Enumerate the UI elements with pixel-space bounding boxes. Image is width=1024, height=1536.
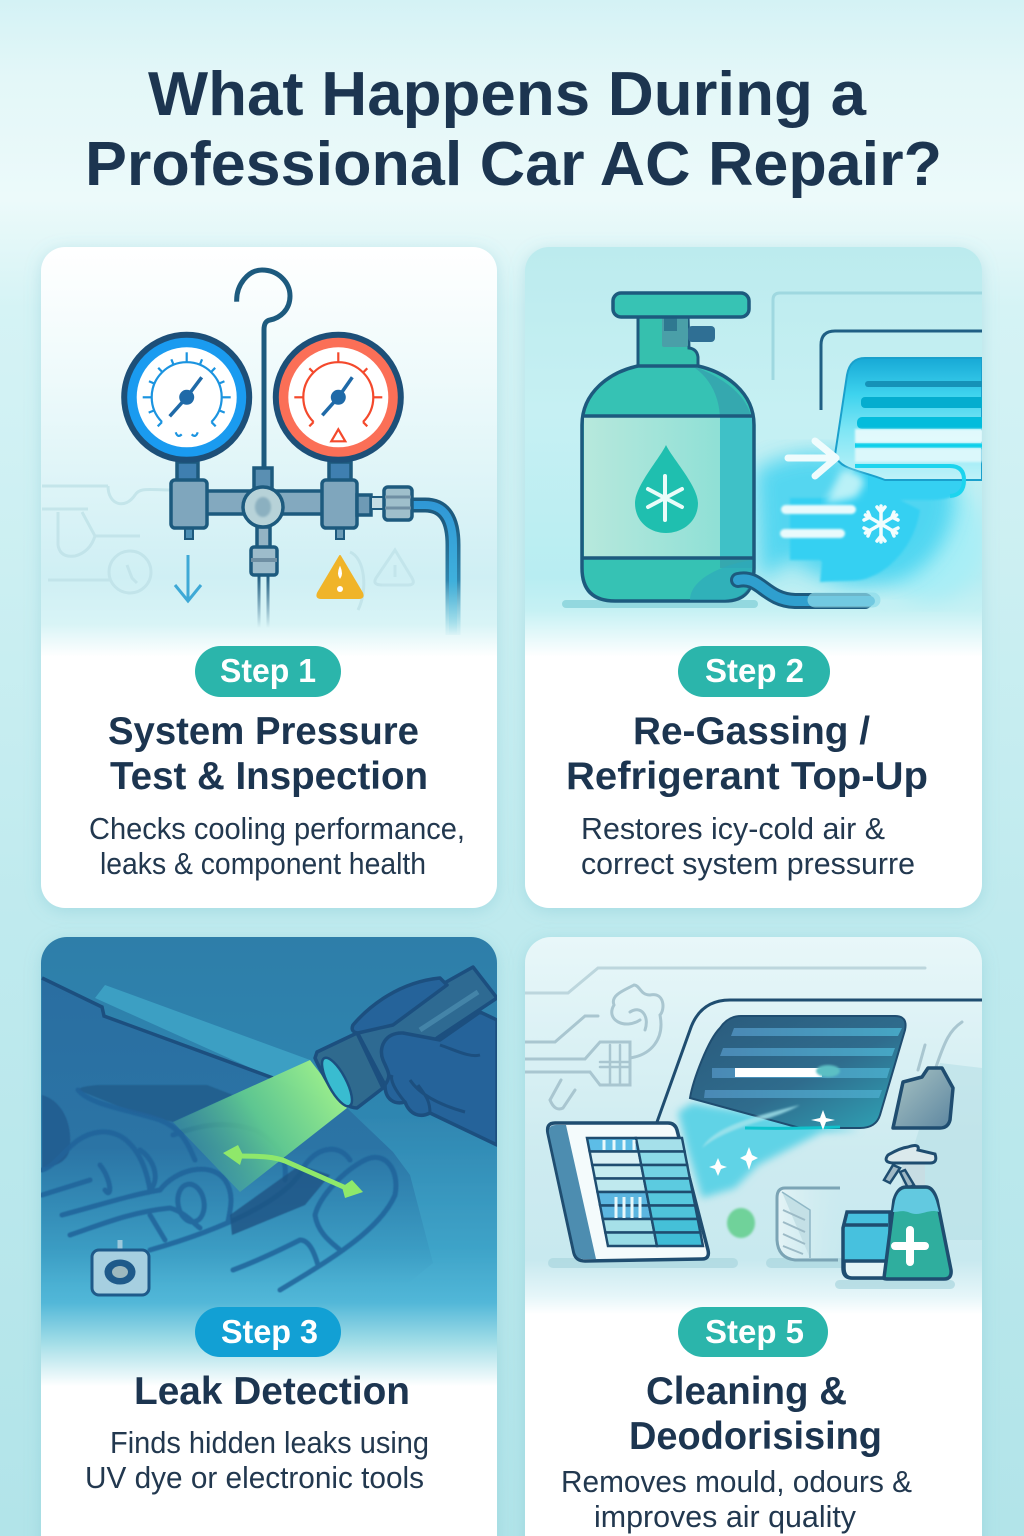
- bottle body: [582, 366, 754, 601]
- illustration: refrigerant bottle and vent: [562, 293, 987, 608]
- bottle cap: [613, 293, 749, 317]
- card background 3: [41, 937, 497, 1536]
- spray bottle: [884, 1146, 951, 1279]
- step 5 description: [561, 1464, 912, 1534]
- panel: step 3 leak detection: [41, 937, 497, 1536]
- icon: down arrow: [175, 555, 201, 601]
- step 3 pill: [195, 1307, 341, 1357]
- step 1 description: Checks cooling performance,: [89, 811, 465, 846]
- step 2 description: correct system pressurre: [581, 846, 915, 881]
- step 2 heading: Refrigerant Top-Up: [566, 755, 928, 798]
- step 5 description: Removes mould, odours &: [561, 1464, 912, 1499]
- red gauge: [276, 335, 401, 460]
- panel: step 5 cleaning and deodorising: [525, 937, 982, 1536]
- ground shadows: [548, 1258, 955, 1289]
- UV light beam: [173, 1060, 347, 1192]
- step 1 heading: System Pressure: [108, 710, 419, 753]
- step 5 heading: Deodorisising: [629, 1415, 882, 1458]
- step 5 heading: Cleaning &: [646, 1370, 847, 1413]
- dashboard line: [657, 1000, 982, 1122]
- engine parts: [42, 1085, 396, 1290]
- step 1 pill: Step 1: [220, 652, 316, 689]
- snowflake: [864, 506, 898, 542]
- pale right glow: [898, 490, 982, 604]
- step 3 pill: Step 3: [221, 1313, 318, 1350]
- leak trace: [223, 1145, 363, 1198]
- cleaning product bottle: [893, 1068, 953, 1128]
- title: What Happens During a: [148, 60, 867, 129]
- step 2 pill: Step 2: [705, 652, 804, 689]
- step 3 description: UV dye or electronic tools: [85, 1460, 424, 1495]
- step 2 heading: [566, 710, 928, 798]
- manifold body: [171, 462, 412, 575]
- title: [85, 60, 942, 199]
- cold air glow: [755, 453, 954, 586]
- hose: [412, 505, 453, 635]
- icon: refrigerant drop: [635, 445, 698, 533]
- step 3 description: [85, 1425, 429, 1495]
- step 3 heading: Leak Detection: [134, 1370, 410, 1413]
- step 5 pill: Step 5: [705, 1313, 804, 1350]
- bottle label: [584, 417, 720, 558]
- lower tubes: [259, 575, 268, 628]
- UV torch: [315, 967, 497, 1110]
- vent: [690, 1016, 906, 1128]
- step 3 description: Finds hidden leaks using: [110, 1425, 429, 1460]
- card background 4: [525, 937, 982, 1536]
- bottle valve: [688, 326, 715, 342]
- hood highlight strip: [95, 985, 310, 1078]
- illustration: UV torch on engine bay: [42, 967, 497, 1300]
- gloved hand: [352, 978, 497, 1145]
- ghost car outline: [42, 486, 413, 610]
- right wall shade: [900, 1063, 982, 1240]
- vent slats: [855, 381, 987, 448]
- step 1 description: [89, 811, 465, 881]
- hose to bottle: [738, 579, 865, 601]
- bottle shadow: [562, 600, 758, 608]
- step 2 heading: Re-Gassing /: [633, 710, 870, 753]
- jar: [843, 1212, 890, 1278]
- step 2 pill: [678, 646, 830, 697]
- sparkles: [709, 1110, 835, 1176]
- vent frames: [773, 293, 982, 380]
- filter grid: [587, 1138, 703, 1246]
- step 1 pill: [195, 646, 341, 697]
- step 2 description: [581, 811, 915, 881]
- panel: step 1 system pressure test: [41, 247, 497, 908]
- title: Professional Car AC Repair?: [85, 130, 942, 199]
- mould patch: [727, 1208, 755, 1238]
- panel: step 2 re-gassing: [525, 247, 987, 908]
- step 1 heading: Test & Inspection: [110, 755, 428, 798]
- step 1 description: leaks & component health: [100, 846, 426, 881]
- icon: warning triangle: [317, 556, 363, 598]
- hook rod: [237, 270, 290, 470]
- step 5 heading: [629, 1370, 882, 1458]
- card background 2: [525, 247, 982, 908]
- electronic leak sensor: [92, 1240, 149, 1295]
- mist streaks: [702, 1105, 800, 1148]
- airflow lines: [780, 505, 856, 538]
- air freshness mist: [678, 1103, 860, 1198]
- replacement filter box: [777, 1188, 840, 1260]
- bottle neck: [638, 316, 698, 366]
- card background 1: [41, 247, 497, 908]
- air arrows: [788, 441, 836, 476]
- illustration: vent cleaning: [525, 968, 982, 1289]
- blue gauge: [124, 335, 249, 460]
- step 1 heading: [108, 710, 428, 798]
- hood shape: [42, 980, 428, 1244]
- cabin air filter: [548, 1123, 708, 1261]
- illustration: manifold gauges: [42, 270, 453, 635]
- step 5 pill: [678, 1307, 828, 1357]
- vent slats 5: [731, 1028, 902, 1036]
- step 5 description: improves air quality: [594, 1499, 856, 1534]
- step 2 description: Restores icy-cold air &: [581, 811, 885, 846]
- vent body: [835, 358, 982, 480]
- ghost hardware: [525, 968, 962, 1109]
